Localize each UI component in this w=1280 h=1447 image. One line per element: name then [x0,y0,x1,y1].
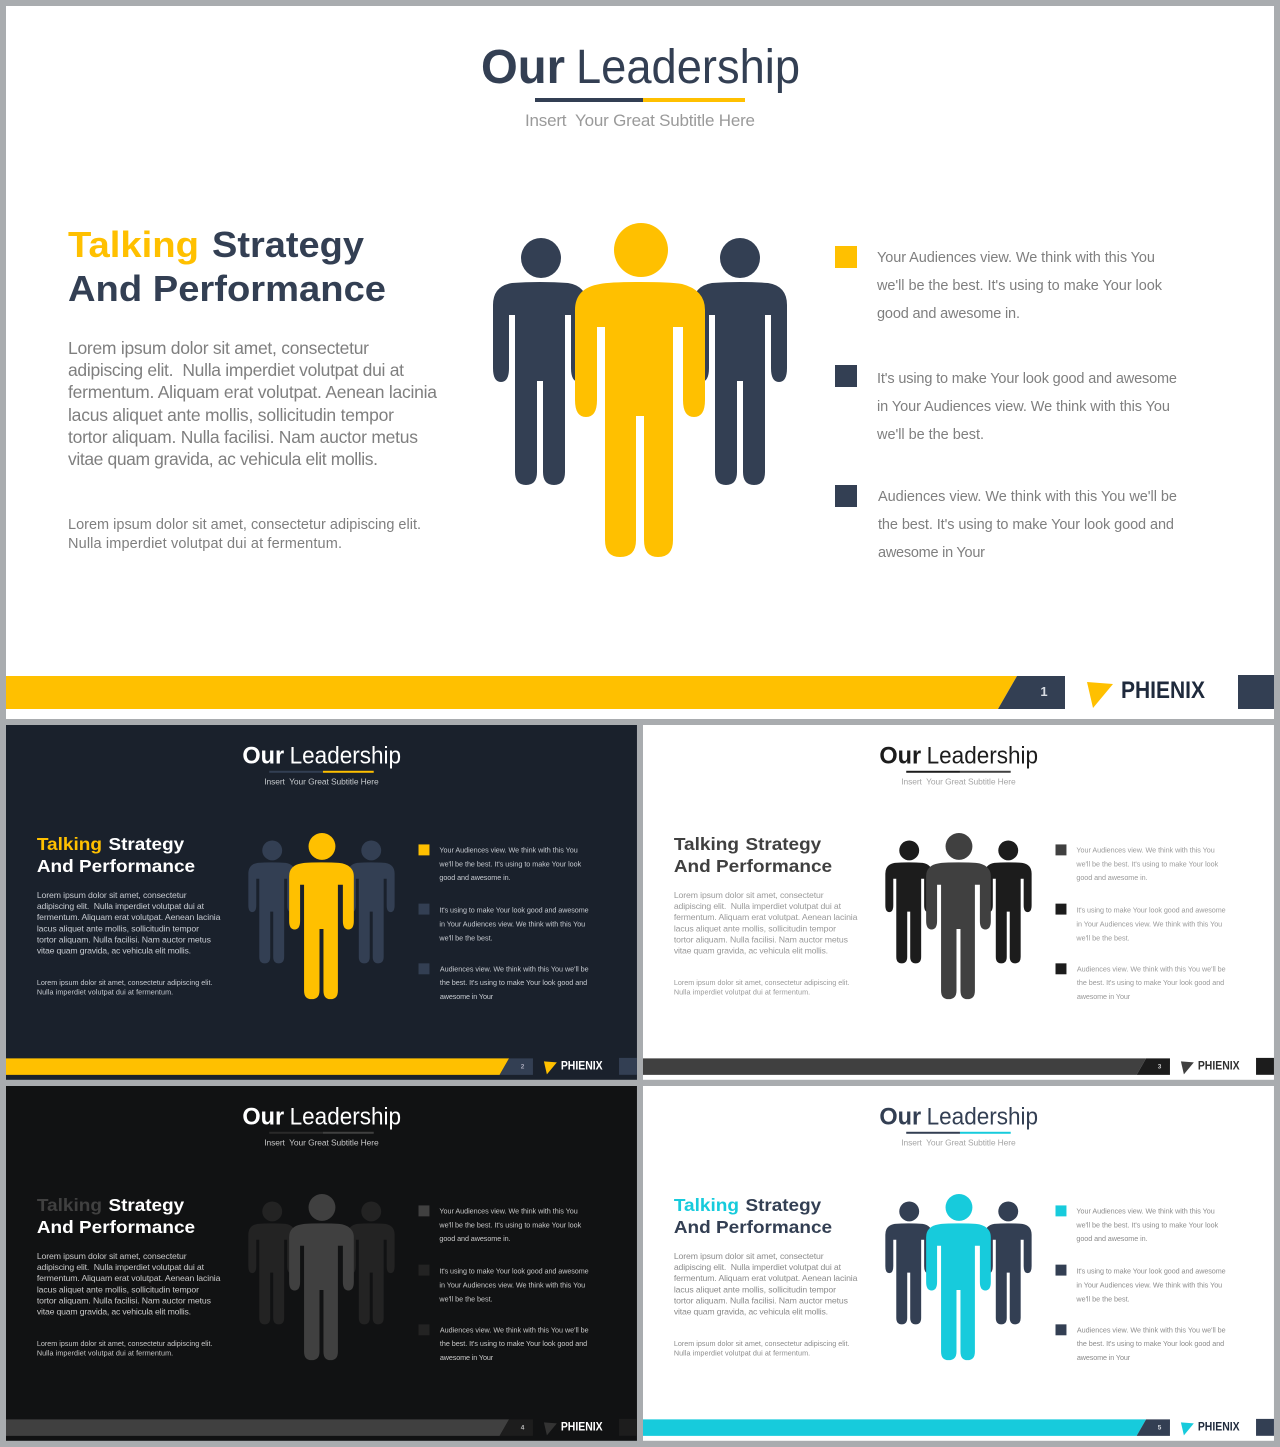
title [242,742,401,769]
title underline [906,1132,1011,1134]
footer bar: PHIENIX [1121,677,1205,704]
body paragraph: Lorem ipsum dolor sit amet, consectetur [68,338,369,358]
bullet 2 [1056,904,1226,942]
heading: Strategy [746,834,821,854]
footer bar: 3 [1158,1063,1162,1070]
bullet 1 [419,1205,582,1243]
title underline [269,1132,374,1134]
title: Our [879,742,921,769]
slide 5: white and cyan variant [643,1086,1274,1441]
bullet 1 [835,246,1163,322]
bullet 3 [835,485,1177,561]
bullet 1: we'll be the best. It's using to make Your look [876,278,1163,294]
bullet 2: in Your Audiences view. We think with this You [1076,1281,1222,1290]
bullet 2: we'll be the best. [1075,1294,1130,1303]
heading: Strategy [746,1195,821,1215]
bullet 2: in Your Audiences view. We think with this You [877,399,1170,415]
bullet 2 [419,1265,589,1303]
bullet 1: Your Audiences view. We think with this You [439,1206,578,1215]
secondary paragraph: Lorem ipsum dolor sit amet, consectetur adipiscing elit. [37,978,213,987]
heading [68,224,386,309]
bullet 1: good and awesome in. [439,1234,511,1243]
slide 1: main white and yellow variant [6,6,1274,719]
secondary paragraph: Nulla imperdiet volutpat dui at fermentum. [37,988,173,997]
footer bar: PHIENIX [1198,1058,1240,1072]
body paragraph: fermentum. Aliquam erat volutpat. Aenean lacinia [68,382,437,402]
heading: And Performance [68,268,386,309]
bullet 2: we'll be the best. [1075,933,1130,942]
slide 3: white greyscale variant [643,725,1274,1080]
title [879,1103,1038,1130]
footer bar: 2 [521,1063,525,1070]
secondary paragraph [674,978,850,997]
body paragraph [68,338,437,469]
secondary paragraph: Lorem ipsum dolor sit amet, consectetur adipiscing elit. [674,978,850,987]
body paragraph: adipiscing elit. Nulla imperdiet volutpat dui at [674,1262,842,1272]
body paragraph: adipiscing elit. Nulla imperdiet volutpat dui at [674,901,842,911]
title underline [269,771,374,773]
bullet 3: awesome in Your [1077,1353,1131,1362]
bullet 1: we'll be the best. It's using to make Your look [438,1220,582,1229]
secondary paragraph: Nulla imperdiet volutpat dui at fermentum. [674,1349,810,1358]
bullet 3: the best. It's using to make Your look good and [1077,978,1224,987]
heading: Talking [37,834,102,854]
bullet 2: in Your Audiences view. We think with this You [439,920,585,929]
bullet 1: Your Audiences view. We think with this You [439,845,578,854]
icon: three people [885,833,1032,999]
heading: Strategy [109,834,184,854]
bullet 2 [1056,1265,1226,1303]
body paragraph: fermentum. Aliquam erat volutpat. Aenean lacinia [37,1273,221,1283]
body paragraph: vitae quam gravida, ac vehicula elit mollis. [68,449,378,469]
bullet 3: Audiences view. We think with this You we'll be [1077,1325,1226,1334]
secondary paragraph [37,1339,213,1358]
bullet 3 [1056,963,1226,1001]
body paragraph: tortor aliquam. Nulla facilisi. Nam auctor metus [674,934,849,944]
title: Our [242,742,284,769]
secondary paragraph [37,978,213,997]
bullet 3: awesome in Your [440,992,494,1001]
title underline [906,771,1011,773]
icon: three people [248,1194,395,1360]
bullet 2: we'll be the best. [438,933,493,942]
heading: And Performance [37,856,195,876]
bullet 2: in Your Audiences view. We think with this You [1076,920,1222,929]
subtitle: Insert Your Great Subtitle Here [901,777,1016,787]
title: Our [481,41,565,94]
title: Leadership [290,742,401,769]
body paragraph: fermentum. Aliquam erat volutpat. Aenean lacinia [674,912,858,922]
body paragraph: lacus aliquet ante mollis, sollicitudin tempor [674,1285,836,1295]
body paragraph: lacus aliquet ante mollis, sollicitudin tempor [37,924,199,934]
body paragraph: vitae quam gravida, ac vehicula elit mollis. [37,945,191,955]
bullet 2 [835,365,1177,443]
body paragraph: tortor aliquam. Nulla facilisi. Nam auctor metus [37,1295,212,1305]
bullet 1: we'll be the best. It's using to make Your look [1075,859,1219,868]
body paragraph: fermentum. Aliquam erat volutpat. Aenean lacinia [674,1273,858,1283]
bullet 3: Audiences view. We think with this You we'll be [878,489,1177,505]
heading: And Performance [37,1217,195,1237]
bullet 3: Audiences view. We think with this You we'll be [440,1325,589,1334]
bullet 1: good and awesome in. [1076,873,1148,882]
bullet 2: It's using to make Your look good and awesome [439,906,589,915]
heading: Strategy [212,224,364,265]
title: Leadership [290,1103,401,1130]
heading: Talking [37,1195,102,1215]
body paragraph: vitae quam gravida, ac vehicula elit mollis. [674,945,828,955]
footer bar [6,1058,637,1075]
bullet 1 [1056,1205,1219,1243]
footer bar [6,1419,637,1436]
bullet 3: the best. It's using to make Your look good and [1077,1339,1224,1348]
body paragraph: lacus aliquet ante mollis, sollicitudin tempor [674,924,836,934]
bullet 2: we'll be the best. [438,1294,493,1303]
title: Leadership [927,742,1038,769]
bullet 3: awesome in Your [440,1353,494,1362]
bullet 1: we'll be the best. It's using to make Your look [438,859,582,868]
subtitle: Insert Your Great Subtitle Here [264,1138,379,1148]
bullet 1: we'll be the best. It's using to make Your look [1075,1220,1219,1229]
bullet 1: Your Audiences view. We think with this You [1076,1206,1215,1215]
bullet 3: Audiences view. We think with this You we'll be [440,964,589,973]
bullet 2: It's using to make Your look good and awesome [1076,1267,1226,1276]
bullet 1 [1056,844,1219,882]
secondary paragraph: Lorem ipsum dolor sit amet, consectetur adipiscing elit. [674,1339,850,1348]
title underline [535,98,745,102]
bullet 1 [419,844,582,882]
footer bar [643,1419,1274,1436]
body paragraph [674,1251,858,1316]
bullet 3: the best. It's using to make Your look good and [440,1339,587,1348]
bullet 2: It's using to make Your look good and awesome [1076,906,1226,915]
bullet 1: Your Audiences view. We think with this You [877,250,1155,266]
bullet 3: awesome in Your [1077,992,1131,1001]
icon: three people [248,833,395,999]
bullet 1: good and awesome in. [1076,1234,1148,1243]
footer bar: PHIENIX [1198,1419,1240,1433]
body paragraph: fermentum. Aliquam erat volutpat. Aenean lacinia [37,912,221,922]
bullet 1: good and awesome in. [877,306,1020,322]
body paragraph: vitae quam gravida, ac vehicula elit mollis. [674,1306,828,1316]
bullet 1: Your Audiences view. We think with this You [1076,845,1215,854]
secondary paragraph [674,1339,850,1358]
slide 4: black greyscale variant [6,1086,637,1441]
footer bar: 4 [521,1424,525,1431]
heading [37,834,195,876]
icon: three people [493,223,787,557]
body paragraph [674,890,858,955]
bullet 2: in Your Audiences view. We think with this You [439,1281,585,1290]
title: Our [879,1103,921,1130]
bullet 3 [419,1324,589,1362]
bullet 2: we'll be the best. [876,427,984,443]
bullet 2 [419,904,589,942]
bullet 3: the best. It's using to make Your look good and [440,978,587,987]
footer bar [643,1058,1274,1075]
body paragraph: Lorem ipsum dolor sit amet, consectetur [37,1251,187,1261]
heading [37,1195,195,1237]
subtitle: Insert Your Great Subtitle Here [525,111,755,130]
footer bar: PHIENIX [561,1419,603,1433]
body paragraph: lacus aliquet ante mollis, sollicitudin tempor [37,1285,199,1295]
bullet 3 [1056,1324,1226,1362]
footer bar: PHIENIX [561,1058,603,1072]
secondary paragraph: Lorem ipsum dolor sit amet, consectetur adipiscing elit. [68,517,421,533]
slide 2: dark navy variant [6,725,637,1080]
body paragraph: Lorem ipsum dolor sit amet, consectetur [674,1251,824,1261]
heading: Strategy [109,1195,184,1215]
body paragraph [37,890,221,955]
body paragraph: adipiscing elit. Nulla imperdiet volutpat dui at [37,901,205,911]
secondary paragraph: Nulla imperdiet volutpat dui at fermentum. [37,1349,173,1358]
subtitle: Insert Your Great Subtitle Here [901,1138,1016,1148]
heading [674,834,832,876]
heading: And Performance [674,856,832,876]
heading: And Performance [674,1217,832,1237]
heading [674,1195,832,1237]
body paragraph: tortor aliquam. Nulla facilisi. Nam auctor metus [674,1295,849,1305]
title [242,1103,401,1130]
body paragraph: lacus aliquet ante mollis, sollicitudin tempor [68,405,394,425]
bullet 3 [419,963,589,1001]
heading: Talking [68,224,199,265]
bullet 2: It's using to make Your look good and awesome [439,1267,589,1276]
body paragraph: tortor aliquam. Nulla facilisi. Nam auctor metus [37,934,212,944]
body paragraph: Lorem ipsum dolor sit amet, consectetur [37,890,187,900]
bullet 1: good and awesome in. [439,873,511,882]
body paragraph: vitae quam gravida, ac vehicula elit mollis. [37,1306,191,1316]
bullet 3: Audiences view. We think with this You we'll be [1077,964,1226,973]
title: Our [242,1103,284,1130]
body paragraph: adipiscing elit. Nulla imperdiet volutpat dui at [37,1262,205,1272]
heading: Talking [674,1195,739,1215]
body paragraph [37,1251,221,1316]
secondary paragraph: Nulla imperdiet volutpat dui at fermentum. [674,988,810,997]
secondary paragraph: Lorem ipsum dolor sit amet, consectetur adipiscing elit. [37,1339,213,1348]
footer bar: 5 [1158,1424,1162,1431]
body paragraph: adipiscing elit. Nulla imperdiet volutpat dui at [68,360,404,380]
secondary paragraph: Nulla imperdiet volutpat dui at fermentum. [68,536,342,552]
title [879,742,1038,769]
title: Leadership [576,41,800,94]
body paragraph: tortor aliquam. Nulla facilisi. Nam auctor metus [68,427,418,447]
title: Leadership [927,1103,1038,1130]
icon: three people [885,1194,1032,1360]
title [481,41,800,94]
body paragraph: Lorem ipsum dolor sit amet, consectetur [674,890,824,900]
subtitle: Insert Your Great Subtitle Here [264,777,379,787]
bullet 3: awesome in Your [878,545,985,561]
footer bar: 1 [1040,684,1048,699]
secondary paragraph [68,517,421,552]
bullet 2: It's using to make Your look good and awesome [877,371,1177,387]
footer bar [6,675,1274,709]
heading: Talking [674,834,739,854]
bullet 3: the best. It's using to make Your look good and [878,517,1174,533]
